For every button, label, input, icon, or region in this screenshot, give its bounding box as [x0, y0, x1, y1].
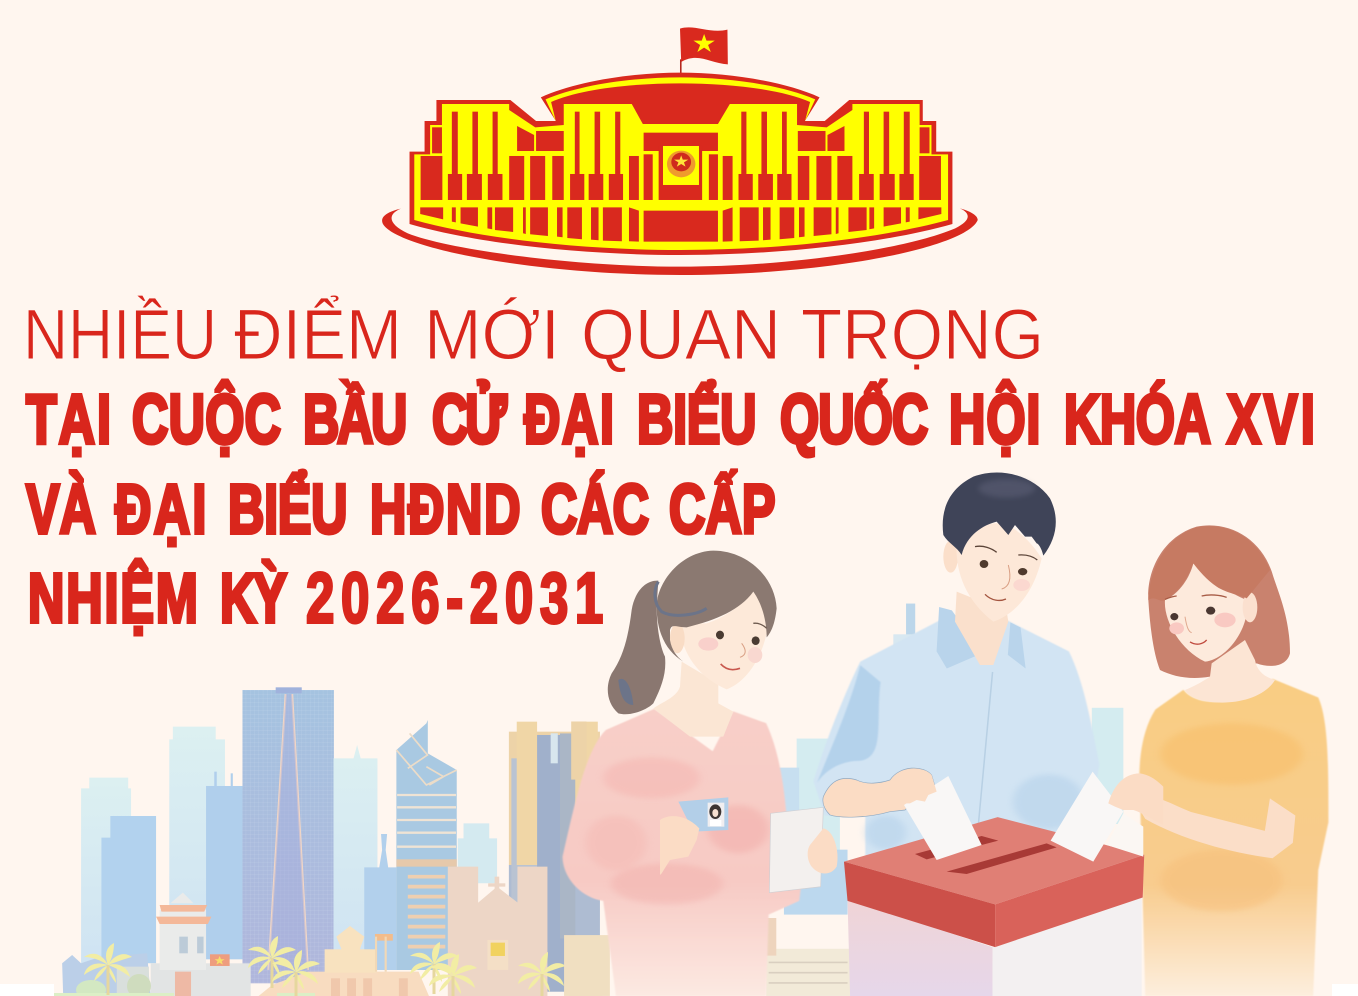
ballot slots: [915, 836, 1057, 874]
lid left side: [844, 862, 995, 947]
pink mottling: [603, 757, 700, 798]
hair back: [1148, 525, 1290, 678]
people voting illustration: [560, 604, 1328, 996]
orange t-shirt: [1139, 679, 1328, 996]
hand holding ID card: [660, 816, 699, 875]
neck: [653, 662, 733, 737]
building: right low pavilion: [569, 947, 602, 996]
arm: [1135, 796, 1295, 858]
title line 4: [28, 559, 603, 639]
white strip at bottom left: [0, 984, 54, 996]
left woman's right hand: [808, 828, 838, 874]
neck: [955, 592, 1008, 665]
person: man in blue, body: [813, 607, 1099, 856]
ballot box: [844, 817, 1144, 996]
face: [1165, 563, 1247, 662]
title line 2: BẦU: [303, 380, 407, 458]
right woman's hand: [1108, 773, 1163, 825]
building: cathedral: [448, 867, 547, 996]
hair cap: [657, 551, 777, 662]
title line 2: HỘI: [949, 380, 1040, 458]
box front right face: [993, 898, 1142, 996]
skyline illustration: [62, 687, 602, 996]
blue shirt: [813, 621, 1099, 856]
hair: [943, 473, 1056, 556]
collar: [937, 607, 1026, 668]
dome yellow stripe: [546, 77, 815, 121]
left woman's ballot paper: [769, 807, 823, 893]
title line 3: VÀ: [26, 470, 96, 548]
title line 1: TRỌNG: [801, 296, 1044, 375]
low pavilion behind box: [564, 918, 850, 996]
title block: [23, 295, 1315, 639]
facial features: [698, 623, 767, 670]
orange mottling: [1161, 723, 1303, 785]
title line 3: [26, 470, 776, 548]
title line 2: TẠI: [26, 380, 111, 458]
fringe: [1148, 526, 1270, 601]
facial features: [975, 546, 1037, 600]
palm trees and ground planting: [54, 936, 566, 996]
person: woman in pink, body: [563, 709, 804, 996]
ear: [943, 541, 958, 573]
lid right side: [995, 855, 1144, 947]
title line 2: CUỘC: [132, 380, 281, 458]
man's ballot paper: [904, 776, 982, 860]
face: [680, 592, 767, 689]
title line 1: [23, 295, 1044, 375]
building: pale left tower: [81, 778, 131, 970]
lid top: [844, 817, 1144, 904]
building: pale right tower: [334, 745, 377, 963]
building: grey gate temple: [117, 893, 251, 996]
hair tie and shading: [655, 582, 707, 615]
building: landmark tower: [242, 687, 334, 983]
ID card: [678, 797, 728, 832]
title line 2: CỬ: [432, 380, 507, 458]
pale area behind right ballot: [1107, 813, 1143, 857]
facial features: [1165, 595, 1236, 644]
building: yellow pavilion: [258, 926, 429, 996]
box front left face: [848, 899, 993, 996]
central block: [644, 133, 718, 242]
emblem panel: [663, 146, 699, 185]
building yellow facade: [414, 104, 948, 250]
building: blue mid tower: [206, 772, 242, 959]
logo: National Assembly building: [382, 27, 978, 275]
right woman's head: [1148, 525, 1290, 703]
title line 3: ĐẠI: [115, 470, 206, 548]
base ellipse swoosh: [382, 208, 978, 275]
building: beige twin tower: [509, 722, 600, 992]
building silhouette: [410, 73, 952, 255]
neck: [1185, 640, 1275, 703]
title line 1: NHIỀU: [23, 296, 217, 375]
title line 3: CÁC: [541, 470, 649, 548]
man's fingers: [893, 769, 937, 803]
pink blouse: [563, 709, 804, 996]
title line 4: KỲ: [220, 559, 287, 637]
face: [956, 523, 1042, 622]
title line 1: MỚI: [424, 296, 560, 375]
ear: [670, 623, 685, 653]
shirt shading: [817, 665, 881, 783]
building: diamond tower: [396, 720, 457, 970]
building: pale rear block: [458, 823, 497, 883]
ear: [1243, 592, 1257, 622]
icon: national emblem: [667, 151, 695, 177]
building: blue left tower: [101, 816, 156, 963]
building: pale tall tower: [169, 727, 225, 957]
title line 2: [26, 380, 1315, 458]
title line 3: BIỂU: [228, 470, 348, 548]
title line 3: CẤP: [669, 470, 776, 548]
ponytail shading: [618, 679, 633, 705]
person: woman in orange, body: [1135, 679, 1328, 996]
title line 2: BIỂU: [637, 380, 757, 458]
ponytail: [608, 581, 665, 714]
left woman's head: [608, 551, 777, 737]
title line 1: QUAN: [581, 296, 781, 375]
title line 2: KHÓA: [1064, 380, 1211, 458]
man's head: [943, 473, 1056, 665]
hair highlight: [978, 479, 1035, 498]
window rows, left wing: [420, 112, 639, 242]
title line 4: 2026-2031: [306, 559, 603, 639]
hands, ballots and ID card: [660, 768, 1163, 893]
icon: Vietnamese flag: [680, 27, 728, 64]
title line 2: XVI: [1227, 380, 1315, 458]
icon: flagpole: [680, 59, 682, 74]
man's arm: [823, 768, 937, 817]
title line 1: ĐIỂM: [234, 295, 402, 375]
building: blue spire block: [364, 834, 396, 970]
window rows, right wing: [723, 112, 941, 242]
right woman's ballot paper: [1051, 772, 1123, 862]
title line 2: ĐẠI: [524, 380, 614, 458]
left blue pagoda silhouette: [62, 953, 151, 996]
white strip at bottom right: [1332, 984, 1358, 996]
title line 2: QUỐC: [780, 380, 928, 458]
title line 4: NHIỆM: [28, 559, 198, 637]
title line 3: HĐND: [370, 470, 520, 548]
background pale towers: [560, 604, 1123, 939]
